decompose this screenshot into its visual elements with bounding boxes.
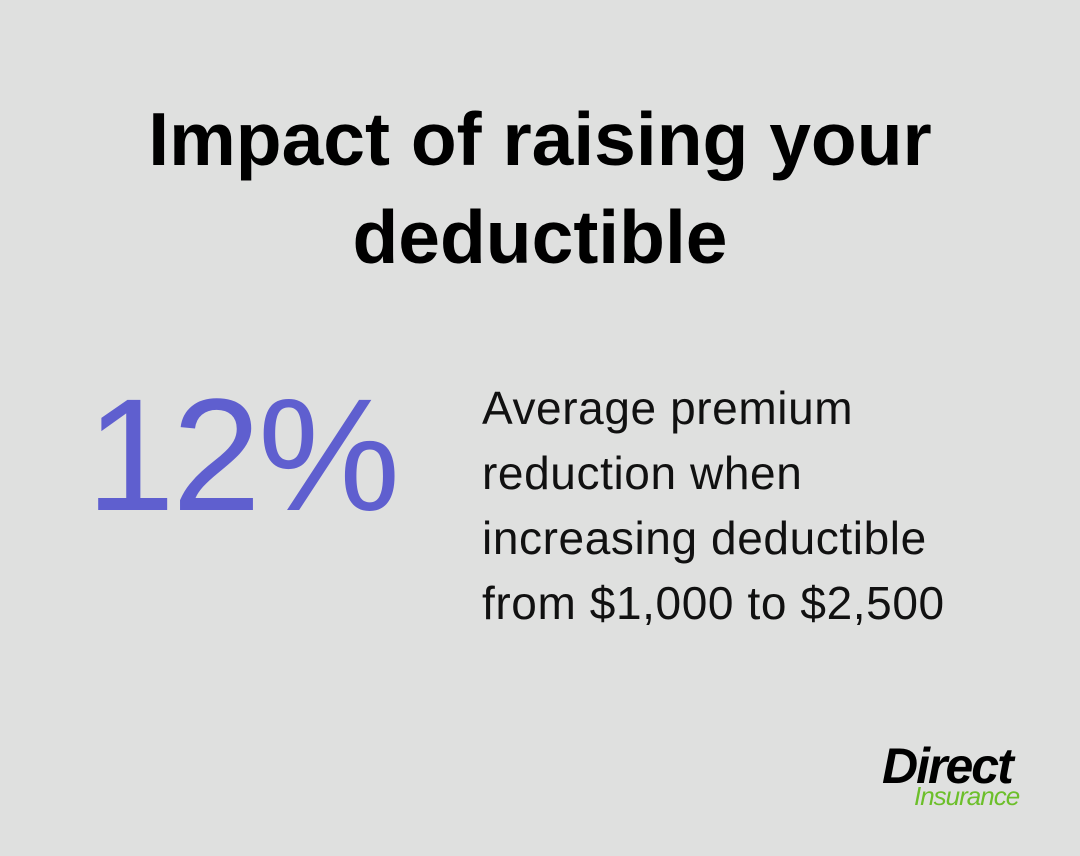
title [148,97,932,279]
logo: Direct Insurance: Insurance [914,781,1019,811]
statistic: 12%: 12% [86,365,397,544]
description text: from $1,000 to $2,500 [482,577,945,629]
logo: Direct Insurance: Direct [882,738,1012,794]
description text: increasing deductible [482,512,927,564]
description text: reduction when [482,447,802,499]
title: Impact of raising your [148,97,932,181]
description text: Average premium [482,382,853,434]
description text [482,382,945,629]
title: deductible [352,195,728,279]
